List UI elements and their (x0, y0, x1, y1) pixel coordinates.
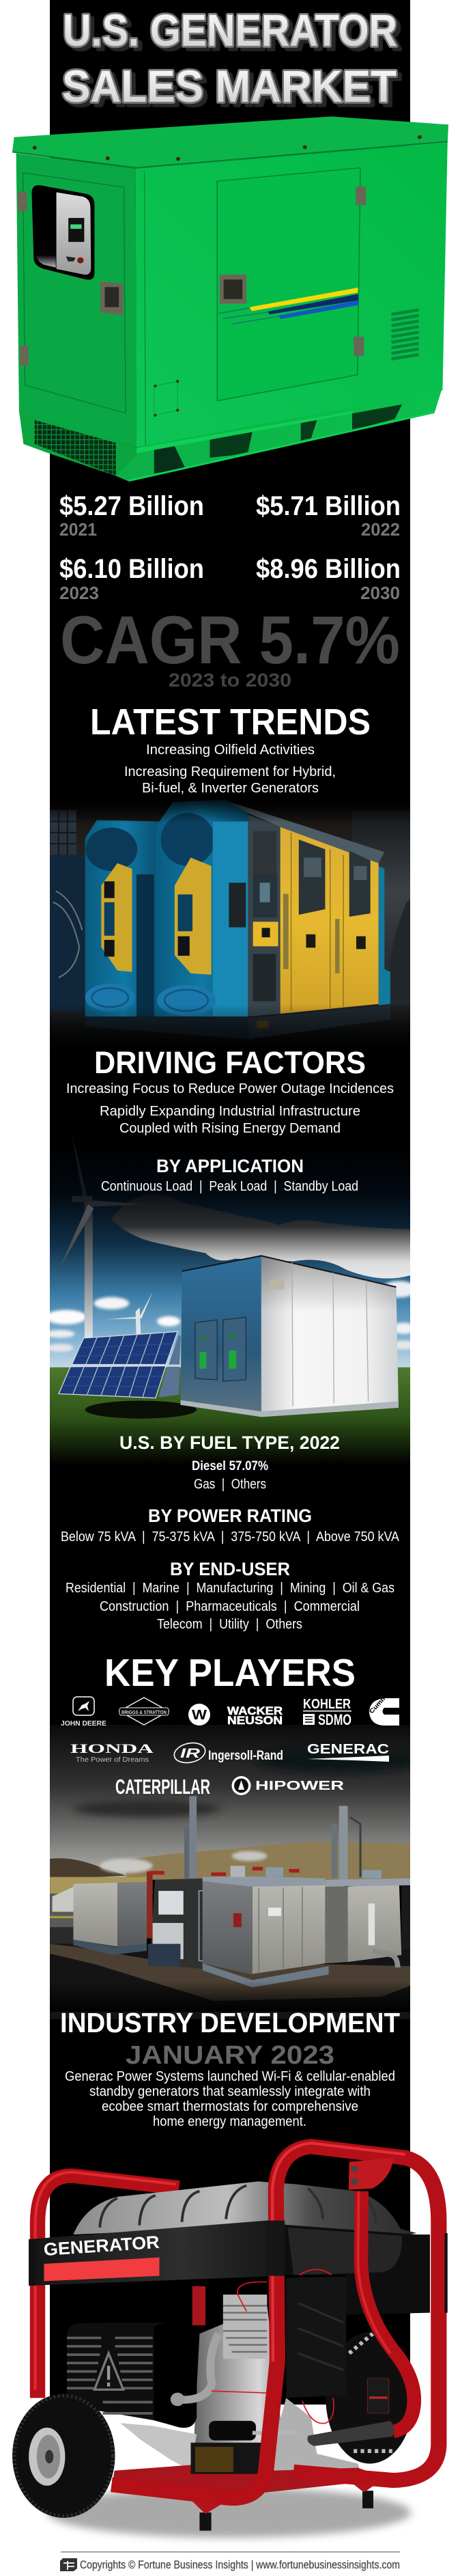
wind turbine (59, 1133, 144, 1340)
by end-user: Telecom | Utility | Others (157, 1616, 302, 1632)
red stripe on band (44, 2258, 159, 2281)
by fuel type (119, 1432, 340, 1492)
clouds (111, 1194, 410, 1279)
sky (50, 1725, 410, 1879)
pull-start cover (326, 2332, 414, 2463)
by end-user: Construction | Pharmaceuticals | Commercial (100, 1598, 360, 1614)
photo: oilfield generator units (50, 1725, 420, 2019)
logo: W circle (188, 1704, 210, 1726)
market value 2022 (256, 491, 401, 540)
photo: blue and yellow industrial generators (50, 799, 410, 1040)
logos: key players (61, 1686, 399, 1799)
logo: Kohler SDMO: KOHLER (303, 1697, 351, 1712)
CAGR: CAGR 5.7% (60, 602, 400, 678)
control box (286, 2276, 346, 2398)
logo: Cummins (368, 1686, 399, 1726)
logo: Wacker Neuson: WACKER (227, 1704, 283, 1717)
logo: Honda: The Power of Dreams (76, 1756, 149, 1764)
options: Continuous Load | Peak Load | Standby Load (101, 1178, 358, 1194)
status screens (199, 1352, 206, 1369)
latest trends text (124, 742, 336, 796)
fuel tank (74, 2181, 417, 2236)
cylinder head fins (223, 2295, 267, 2359)
logo: Ingersoll Rand: Ingersoll-Rand (208, 1749, 283, 1763)
front door (217, 168, 360, 401)
heading: BY POWER RATING (148, 1506, 312, 1526)
generator label: GENERATOR (43, 2232, 160, 2260)
vent slats (392, 310, 419, 359)
options: Residential | Marine | Manufacturing | Mining | Oil & Gas (66, 1580, 394, 1596)
title (62, 5, 397, 111)
middle unit with pipes (147, 1872, 216, 1969)
value: $6.10 Billion (59, 554, 204, 584)
year: 2022 (361, 519, 400, 540)
exhaust pipe (176, 2333, 218, 2400)
yellow cabinet (281, 827, 379, 1014)
development text: Generac Power Systems launched Wi-Fi & cellular-enabled (65, 2068, 395, 2084)
options: Below 75 kVA | 75-375 kVA | 375-750 kVA | Above 750 kVA (61, 1529, 399, 1545)
leading share: Diesel 57.07% (192, 1459, 268, 1473)
value: $8.96 Billion (256, 554, 401, 584)
stripes (250, 288, 358, 311)
hinges (356, 186, 366, 205)
ground (50, 1944, 410, 2019)
value: $5.71 Billion (256, 491, 401, 521)
heading: BY APPLICATION (156, 1156, 304, 1176)
key players heading: KEY PLAYERS (104, 1651, 356, 1695)
red wires (238, 2269, 334, 2424)
driving factors text (66, 1081, 394, 1136)
sky (50, 1148, 410, 1370)
logo: W circle: W (192, 1708, 207, 1723)
control panel (57, 193, 91, 275)
chimneys (184, 1796, 360, 1880)
development text: ecobee smart thermostats for comprehensive (102, 2099, 358, 2114)
container doors (195, 1320, 217, 1380)
unit 2 (203, 1876, 329, 1987)
wheel (12, 2394, 115, 2518)
by application (101, 1156, 358, 1194)
by power rating (61, 1506, 399, 1545)
back frame (38, 2176, 179, 2398)
copyright text: Copyrights © Fortune Business Insights | www.fortunebusinessinsights.com (80, 2558, 400, 2571)
engine mount (264, 2398, 360, 2478)
development text: standby generators that seamlessly integrate with (89, 2083, 371, 2099)
generator 1 lower coil (85, 984, 135, 1012)
ground shadow (47, 2487, 411, 2538)
rooftop equipment (265, 1867, 283, 1877)
driving factors text: Coupled with Rising Energy Demand (119, 1120, 341, 1136)
industry development heading: INDUSTRY DEVELOPMENT (60, 2007, 400, 2038)
muffler box (191, 2443, 265, 2474)
unit 1 (74, 1882, 147, 1955)
driving factors text: Rapidly Expanding Industrial Infrastructure (100, 1103, 360, 1119)
machinery on left (50, 855, 85, 1011)
generator 2 yellow engine (175, 858, 212, 975)
container shadow (85, 1401, 197, 1419)
yellow cabinet control panels (299, 840, 325, 915)
engine block (194, 2305, 287, 2479)
solar panels (59, 1331, 181, 1398)
logo: Cummins: Cummins (368, 1686, 395, 1715)
logo: Generac (307, 1742, 389, 1762)
control box (229, 883, 246, 928)
title line 1: U.S. GENERATOR (63, 5, 397, 55)
others: Gas | Others (194, 1476, 266, 1492)
latest trends text: Increasing Requirement for Hybrid, (124, 764, 336, 779)
market value 2021 (59, 491, 204, 540)
CAGR period: 2023 to 2030 (169, 669, 291, 691)
vent panel (253, 954, 276, 1001)
dark cloud (255, 1747, 420, 1773)
logo: Honda: HONDA (70, 1742, 154, 1756)
foam handle (307, 2421, 394, 2446)
rooftop red pipes (149, 1868, 300, 1874)
plinth (85, 1016, 344, 1040)
logo: Briggs & Stratton: BRIGGS & STRATTON (121, 1711, 167, 1715)
title line 2: SALES MARKET (62, 61, 397, 111)
ground (50, 1368, 410, 1465)
logo: John Deere (61, 1697, 106, 1728)
driving factors text: Increasing Focus to Reduce Power Outage Incidences (66, 1081, 394, 1096)
base plate (111, 2465, 390, 2496)
right background figure (390, 900, 410, 1006)
year: 2030 (360, 583, 400, 603)
frame clamps (266, 2221, 285, 2276)
logo: Hipower (232, 1776, 344, 1795)
logo: Kohler SDMO (303, 1697, 351, 1728)
inner frame tube (361, 2191, 414, 2431)
green generator illustration (12, 117, 448, 482)
generator 1 body (85, 820, 163, 1016)
logo: Caterpillar: CATERPILLAR (115, 1775, 210, 1799)
year: 2021 (59, 519, 97, 540)
bottom fade (85, 1007, 390, 1040)
logo: Ingersoll Rand: IR (180, 1747, 200, 1761)
latches (100, 281, 124, 315)
logo: Briggs & Stratton (119, 1698, 169, 1725)
development text (65, 2068, 395, 2129)
date: JANUARY 2023 (126, 2041, 334, 2070)
right blue strip (379, 866, 390, 1006)
support legs (199, 2512, 212, 2531)
access plate (154, 381, 177, 415)
wire (212, 2391, 267, 2393)
front face (136, 143, 448, 447)
generator 1 yellow engine (101, 863, 132, 972)
heading: BY END-USER (170, 1559, 290, 1579)
logo: Wacker Neuson (227, 1704, 283, 1727)
generator 2 body (156, 800, 248, 1016)
portable red generator illustration (12, 2143, 448, 2538)
footer logo (60, 2558, 77, 2571)
development text: home energy management. (153, 2114, 306, 2129)
black band (29, 2221, 285, 2286)
latest trends heading: LATEST TRENDS (90, 702, 371, 743)
value: $5.27 Billion (59, 491, 204, 521)
market value 2030 (256, 554, 401, 603)
generator 2 blue column (213, 821, 248, 1016)
logo: Honda (70, 1742, 154, 1764)
small building (53, 1887, 74, 1912)
second wind turbine (107, 1292, 153, 1335)
roof (226, 801, 384, 863)
top fade (50, 799, 410, 822)
by end-user (66, 1559, 394, 1632)
tank lower section (285, 2225, 430, 2314)
driving factors heading: DRIVING FACTORS (94, 1045, 366, 1080)
unit 3 (325, 1879, 410, 1967)
yellow logo plate (253, 922, 278, 946)
logo: Generac: GENERAC (307, 1742, 389, 1757)
generator base and lower grille (19, 387, 442, 482)
cylinder (209, 2421, 256, 2441)
market value 2023 (59, 554, 204, 603)
grey column (248, 814, 281, 1016)
right background wall (352, 810, 410, 940)
logo: John Deere: JOHN DEERE (61, 1720, 106, 1728)
logo: Wacker Neuson: NEUSON (227, 1714, 283, 1727)
logo: Kohler SDMO: SDMO (318, 1711, 351, 1728)
handle bracket (349, 2158, 393, 2190)
rear red strut (192, 2286, 205, 2325)
roof (12, 117, 448, 169)
fade into black (50, 1981, 410, 2012)
footer (60, 2551, 400, 2571)
heading: U.S. BY FUEL TYPE, 2022 (119, 1432, 340, 1453)
generator 2 upper coil (161, 813, 215, 866)
steam (100, 1859, 153, 1873)
generator 1 upper coil (86, 827, 137, 871)
left face (16, 153, 136, 447)
screws (33, 135, 422, 417)
yellow cabinet logos (306, 934, 315, 947)
logo: Ingersoll Rand (173, 1741, 283, 1765)
black centre column (50, 0, 410, 2405)
year: 2023 (59, 583, 99, 603)
channel between generators (136, 874, 154, 1016)
latest trends text: Bi-fuel, & Inverter Generators (142, 780, 319, 796)
alternator end cap (154, 2323, 197, 2428)
control panel window (31, 185, 94, 280)
generator body (12, 117, 448, 447)
concrete slab (50, 1944, 410, 2001)
alternator cover (67, 2323, 164, 2423)
logo: Hipower: HIPOWER (255, 1779, 344, 1792)
hills (126, 1842, 410, 1880)
rear window (50, 810, 76, 855)
generator 2 lower coil (157, 985, 216, 1016)
front frame (111, 2146, 439, 2498)
road and yard (50, 1894, 138, 1944)
latest trends text: Increasing Oilfield Activities (146, 742, 315, 758)
photo: container with solar panels and wind turbines (46, 1133, 417, 1465)
left door (23, 173, 126, 413)
container (180, 1255, 399, 1417)
